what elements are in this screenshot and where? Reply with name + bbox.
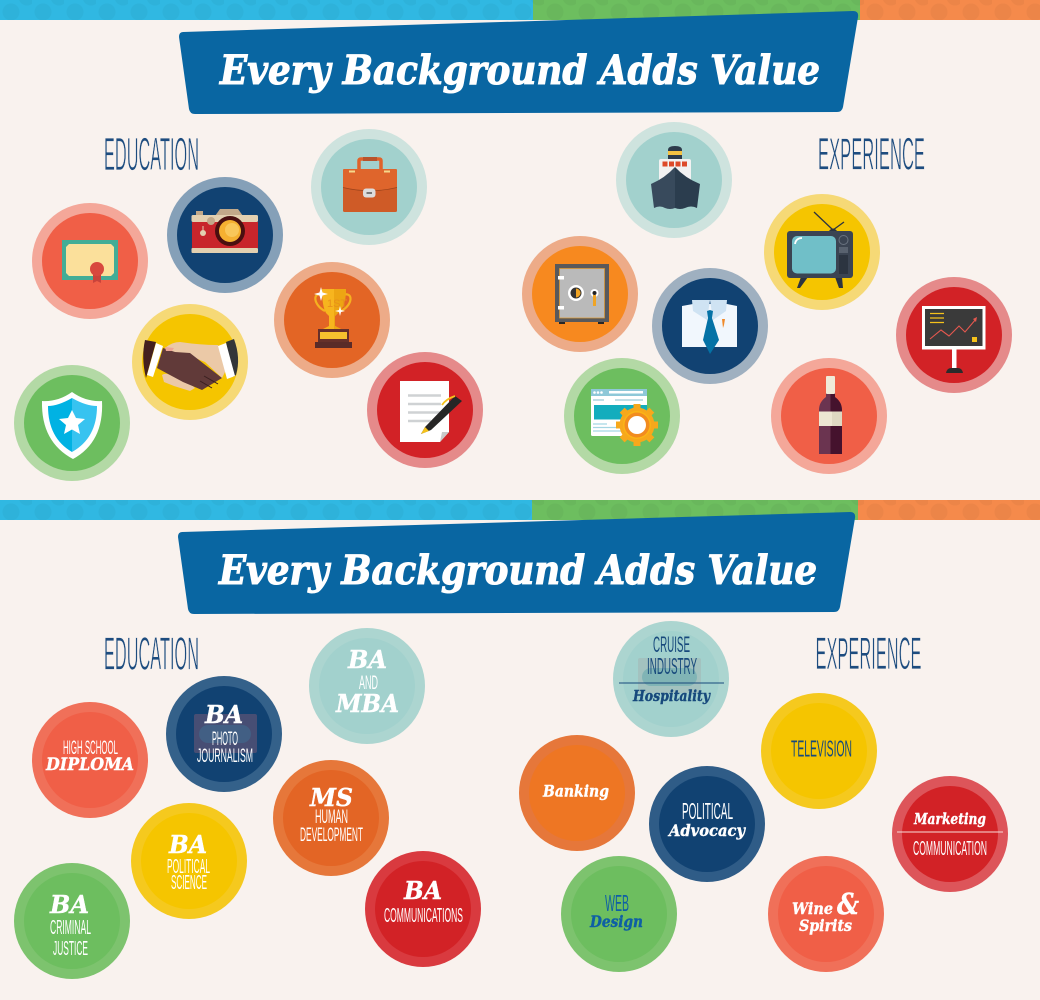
badge: wine and spirits: & bbox=[837, 887, 859, 921]
badge: high school diploma: HIGH SCHOOL bbox=[63, 737, 118, 759]
badge: MS human development: DEVELOPMENT bbox=[300, 824, 363, 846]
badge: wine and spirits: Wine bbox=[792, 899, 833, 918]
badge: marketing communication bbox=[892, 776, 1008, 892]
text: EDUCATION bbox=[104, 128, 199, 180]
badge: political advocacy: POLITICAL bbox=[682, 798, 733, 824]
badge: BA political science bbox=[131, 803, 247, 919]
badge: BA political science: SCIENCE bbox=[171, 872, 207, 894]
badge: safe icon bbox=[522, 236, 638, 352]
badge: BA and MBA: AND bbox=[359, 672, 378, 694]
badge: BA communications bbox=[365, 851, 481, 967]
badge: BA criminal justice bbox=[14, 863, 130, 979]
top colour strip bbox=[0, 0, 1040, 20]
badge: web design: WEB bbox=[605, 890, 629, 916]
badge: BA criminal justice: JUSTICE bbox=[53, 938, 88, 960]
badge: BA political science: BA bbox=[168, 830, 207, 859]
badge: BA photo journalism: JOURNALISM bbox=[197, 745, 253, 767]
title banner (bottom) bbox=[178, 512, 855, 614]
badge: shield icon bbox=[14, 365, 130, 481]
badge: high school diploma: DIPLOMA bbox=[45, 755, 134, 774]
badge: television bbox=[761, 693, 877, 809]
badge: BA and MBA: BA bbox=[347, 645, 387, 674]
badge: BA photo journalism: PHOTO bbox=[212, 728, 238, 750]
badge: trophy icon bbox=[274, 262, 390, 378]
badge: web design and gear icon bbox=[564, 358, 680, 474]
bottom colour strip bbox=[0, 500, 1040, 520]
badge: BA communications: BA bbox=[403, 876, 442, 905]
badge: cruise industry hospitality bbox=[613, 621, 729, 737]
badge: paper and pen icon bbox=[367, 352, 483, 468]
badge: camera icon bbox=[167, 177, 283, 293]
badge: wine bottle icon bbox=[771, 358, 887, 474]
badge: MS human development: MS bbox=[309, 783, 353, 812]
badge: MS human development: HUMAN bbox=[315, 806, 348, 828]
badge: banking: Banking bbox=[542, 782, 609, 800]
badge: cruise industry hospitality: CRUISE bbox=[653, 632, 690, 657]
title banner (bottom): Every Background Adds Value bbox=[218, 547, 817, 594]
badge: television icon bbox=[764, 194, 880, 310]
badge: high school diploma bbox=[32, 702, 148, 818]
badge: BA criminal justice: CRIMINAL bbox=[50, 917, 91, 939]
badge: presentation board icon bbox=[896, 277, 1012, 393]
badge: banking bbox=[519, 735, 635, 851]
badge: wine and spirits: Spirits bbox=[799, 916, 852, 935]
badge: diploma icon bbox=[32, 203, 148, 319]
badge: briefcase icon bbox=[311, 129, 427, 245]
badge: BA and MBA: MBA bbox=[335, 689, 399, 718]
badge: BA photo journalism bbox=[166, 676, 282, 792]
title banner (top) bbox=[179, 11, 858, 114]
badge: BA political science: POLITICAL bbox=[167, 856, 210, 878]
badge: ship icon bbox=[616, 122, 732, 238]
badge: handshake icon bbox=[132, 304, 248, 420]
badge: BA and MBA bbox=[309, 628, 425, 744]
badge: political advocacy: Advocacy bbox=[667, 821, 747, 840]
text: EDUCATION bbox=[104, 628, 199, 680]
badge: BA criminal justice: BA bbox=[49, 890, 89, 919]
badge: BA photo journalism: BA bbox=[204, 700, 243, 729]
badge: cruise industry hospitality: INDUSTRY bbox=[647, 653, 697, 679]
badge: television: TELEVISION bbox=[791, 736, 852, 762]
badge: MS human development bbox=[273, 760, 389, 876]
badge: cruise industry hospitality: Hospitality bbox=[632, 688, 711, 705]
badge: BA communications: COMMUNICATIONS bbox=[384, 905, 463, 927]
badge: marketing communication: Marketing bbox=[913, 811, 986, 828]
badge: shirt and tie icon bbox=[652, 268, 768, 384]
badge: web design: Design bbox=[589, 912, 643, 931]
badge: political advocacy bbox=[649, 766, 765, 882]
badge: trophy icon: 1ST bbox=[327, 298, 347, 310]
badge: web design bbox=[561, 856, 677, 972]
title banner (top): Every Background Adds Value bbox=[219, 47, 820, 94]
badge: wine and spirits bbox=[768, 856, 884, 972]
